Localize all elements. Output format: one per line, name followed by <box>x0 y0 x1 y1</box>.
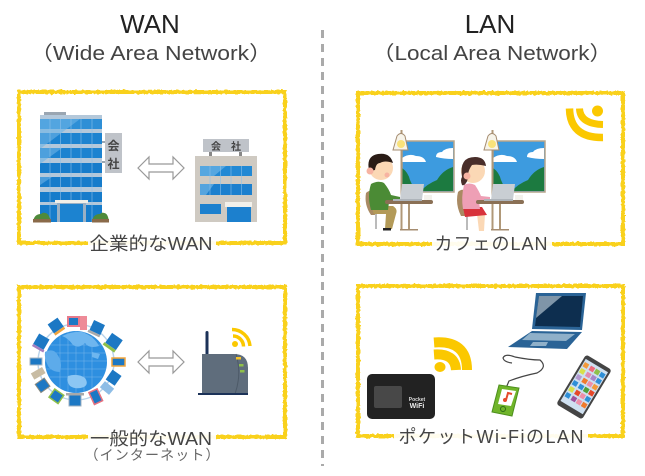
icon: wifi router <box>198 329 250 395</box>
icon: double arrow <box>138 157 184 179</box>
icon: globe with devices <box>30 316 125 406</box>
title: LAN: LAN <box>465 9 515 39</box>
icon: small office: 社 <box>231 140 241 153</box>
title: WAN: WAN <box>120 9 180 39</box>
illustration: woman at cafe <box>457 130 545 231</box>
icon: music player with earphones <box>492 355 543 416</box>
icon: office tower <box>33 112 122 222</box>
icon: smartphone <box>556 354 612 420</box>
subtitle: Local Area Network: （Local Area Network） <box>372 42 612 65</box>
sign text: company: 会 <box>107 138 120 153</box>
subtitle: Wide Area Network: （Wide Area Network） <box>30 42 272 65</box>
illustration: man at cafe <box>366 130 454 230</box>
icon: double arrow <box>138 351 184 373</box>
icon: pocket wifi device: Pocket <box>409 397 426 403</box>
label background <box>88 430 216 445</box>
icon: small office <box>195 139 257 222</box>
label background <box>88 236 216 251</box>
label: corporate WAN: 企業的なWAN <box>90 234 212 254</box>
icon: office tower: 社 <box>107 156 120 171</box>
icon: wifi signal <box>570 106 603 138</box>
label: pocket Wi-Fi LAN: ポケットWi-FiのLAN <box>398 427 584 447</box>
panel: cafe LAN <box>358 93 623 254</box>
panel: corporate WAN <box>19 92 285 254</box>
label background <box>432 236 552 251</box>
icon: laptop <box>508 293 586 349</box>
label: cafe LAN: カフェのLAN <box>434 234 548 254</box>
icon: pocket wifi device <box>367 374 435 419</box>
label: general WAN: 一般的なWAN <box>90 429 212 449</box>
icon: pocket wifi device: WiFi <box>410 403 424 410</box>
panel: general WAN <box>19 287 285 463</box>
icon: wifi signal <box>434 342 467 372</box>
icon: small office: 会 <box>211 140 221 153</box>
label background <box>394 428 588 444</box>
panel: pocket Wi-Fi LAN <box>358 286 623 447</box>
label: internet: （インターネット） <box>84 447 220 463</box>
